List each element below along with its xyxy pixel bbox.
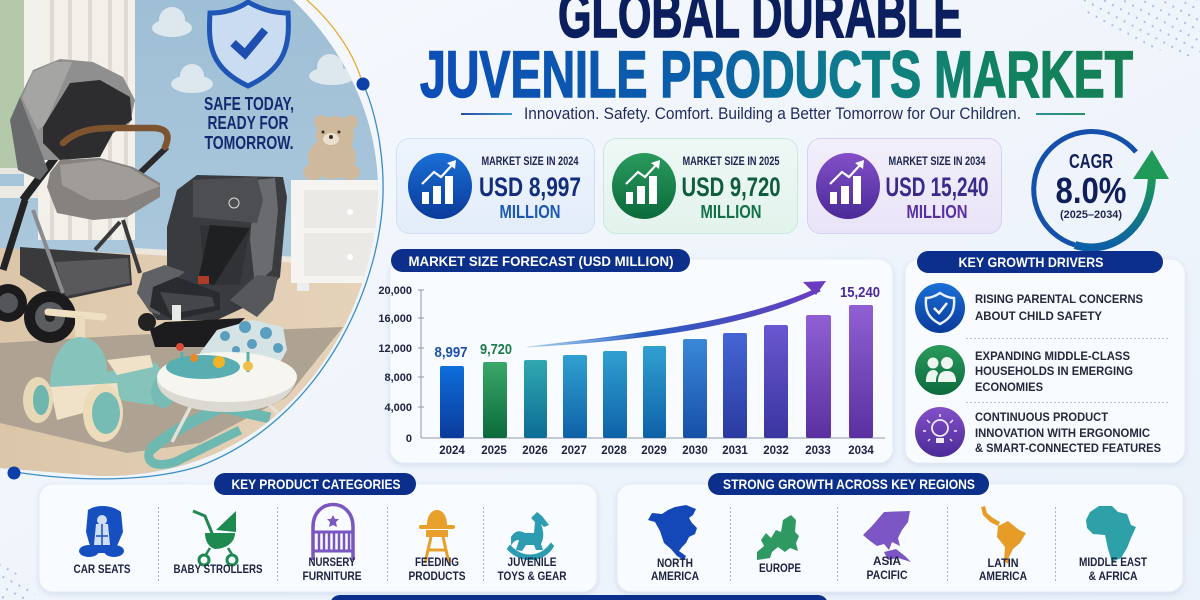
region: latin america: AMERICA [979,569,1027,583]
category: nursery furniture: FURNITURE [302,569,362,583]
region: middle east and africa: & AFRICA [1088,569,1138,583]
category: nursery furniture: NURSERY [308,555,356,569]
stat card: market size 2025: USD 9,720 [682,172,780,202]
year labels: 2027 [561,445,587,457]
driver: product innovation: & SMART-CONNECTED FEATURES [975,441,1161,455]
slogan: safe today, ready for tomorrow [204,94,294,153]
car seat [137,175,287,347]
year labels: 2031 [722,445,748,457]
y axis: 4,000 [384,402,412,414]
year labels: 2034 [848,445,874,457]
heading: strong growth across key regions [708,473,989,495]
frame tubes [3,200,25,270]
stat card: market size 2024 [396,138,594,234]
bottom banner bar [330,595,828,600]
heading: strong growth across key regions: STRONG GROWTH ACROSS KEY REGIONS [723,476,975,492]
year labels: 2028 [601,445,627,457]
year labels: 2032 [763,445,789,457]
driver: product innovation: INNOVATION WITH ERGONOMIC [975,426,1150,440]
category: car seats [74,506,130,576]
region: asia pacific: ASIA [873,554,901,568]
year labels: 2026 [522,445,548,457]
teddy bear [303,115,360,180]
value labels: 8,997 [434,345,468,361]
panel: market size forecast chart [378,249,893,463]
stroller [0,59,168,343]
heading: key product categories: KEY PRODUCT CATEGORIES [232,476,400,492]
panel: key product categories [39,473,597,592]
stat card: market size 2024: MARKET SIZE IN 2024 [482,154,579,168]
slogan: safe today, ready for tomorrow: SAFE TODAY, [204,94,294,114]
region: asia pacific: PACIFIC [866,568,908,582]
bassinet seat [47,158,160,220]
region: europe [757,515,801,575]
region: latin america [979,506,1027,583]
stat card: market size 2025: MILLION [700,202,762,222]
CAGR ring with arrow: CAGR [1069,151,1113,173]
driver: middle-class households: ECONOMIES [975,380,1043,394]
rug [0,327,343,453]
canopy interior [43,80,132,160]
stat card: market size 2034: MARKET SIZE IN 2034 [888,154,986,168]
y axis: 16,000 [378,313,412,325]
year labels: 2025 [481,445,507,457]
icon: blue growth chart [408,153,472,219]
y axis: 20,000 [378,285,412,297]
stat card: market size 2034: MILLION [906,202,968,222]
category: juvenile toys and gear [498,512,567,583]
category: feeding products: PRODUCTS [408,569,466,583]
driver: middle-class households [915,345,1133,395]
value labels [434,285,880,361]
growth arrow [527,281,826,347]
floor [0,248,366,476]
wheels [0,284,27,322]
stat card: market size 2024: USD 8,997 [479,172,581,202]
CAGR ring with arrow: (2025–2034) [1060,209,1122,221]
region: latin america: LATIN [988,556,1018,570]
panel: strong growth across key regions [617,473,1183,592]
driver: child safety: RISING PARENTAL CONCERNS [975,292,1143,306]
undercarriage basket [20,247,132,300]
category: juvenile toys and gear: JUVENILE [508,555,556,569]
y axis: 0 [406,433,412,445]
icon: safety shield [209,2,288,86]
value labels: 9,720 [480,342,512,358]
stat card: market size 2025: MARKET SIZE IN 2025 [682,154,780,168]
slogan: safe today, ready for tomorrow: TOMORROW. [204,133,294,153]
stat card: market size 2024: MILLION [500,202,560,222]
category: baby strollers: BABY STROLLERS [174,562,262,576]
region: europe: EUROPE [759,561,801,575]
category: feeding products: FEEDING [415,555,459,569]
region: middle east and africa [1079,506,1148,583]
driver: middle-class households: EXPANDING MIDDLE-CLASS [975,349,1130,363]
driver: child safety [915,283,1143,333]
y axis: 12,000 [378,343,412,355]
y axis [378,285,885,445]
slogan: safe today, ready for tomorrow: READY FOR [208,113,288,133]
brown handle [63,128,168,147]
driver: child safety: ABOUT CHILD SAFETY [975,309,1102,323]
category: juvenile toys and gear: TOYS & GEAR [498,569,567,583]
region: north america: AMERICA [651,569,699,583]
year labels: 2029 [641,445,667,457]
CAGR ring with arrow [1034,131,1169,247]
wall clouds [152,7,355,93]
category: car seats: CAR SEATS [74,562,130,576]
baby walker [149,320,297,464]
driver: middle-class households: HOUSEHOLDS IN EMERGING [975,364,1133,378]
panel: key growth drivers [905,251,1185,463]
y axis: 8,000 [384,372,412,384]
CAGR ring with arrow: 8.0% [1056,170,1126,211]
heading: market size forecast: MARKET SIZE FORECAST (USD MILLION) [408,253,674,269]
value labels: 15,240 [840,285,880,301]
driver: product innovation [915,407,1161,457]
year labels: 2024 [439,445,465,457]
year labels: 2030 [682,445,708,457]
stat card: market size 2025 [604,138,798,234]
hero photo: nursery with stroller, car seat, ride-on toy and walker [0,0,400,480]
driver: product innovation: CONTINUOUS PRODUCT [975,410,1109,424]
region: north america: NORTH [657,556,693,570]
heading: market size forecast [391,249,690,272]
stat card: market size 2034: USD 15,240 [886,172,988,202]
icon: green growth chart [612,153,676,219]
category: feeding products [408,510,466,583]
heading: key growth drivers [917,251,1163,273]
region: middle east and africa: MIDDLE EAST [1079,555,1148,569]
region: asia pacific [863,511,911,582]
stat card: market size 2034 [808,138,1002,234]
region: north america [648,505,699,583]
icon: purple growth chart [816,153,880,219]
year labels [439,445,874,457]
heading: key product categories [214,473,416,495]
ride-on toy [23,312,175,442]
tagline: Innovation. Safety. Comfort. Building a Better Tomorrow for Our Children. [524,104,1021,123]
category: baby strollers [174,511,262,576]
title [420,0,1133,111]
category: nursery furniture [302,504,362,583]
photo border arcs [307,0,363,85]
year labels: 2033 [805,445,831,457]
bars [440,305,873,438]
canopy [20,59,135,160]
window and curtain [0,0,135,240]
heading: key growth drivers: KEY GROWTH DRIVERS [958,254,1104,270]
dresser [291,180,381,291]
